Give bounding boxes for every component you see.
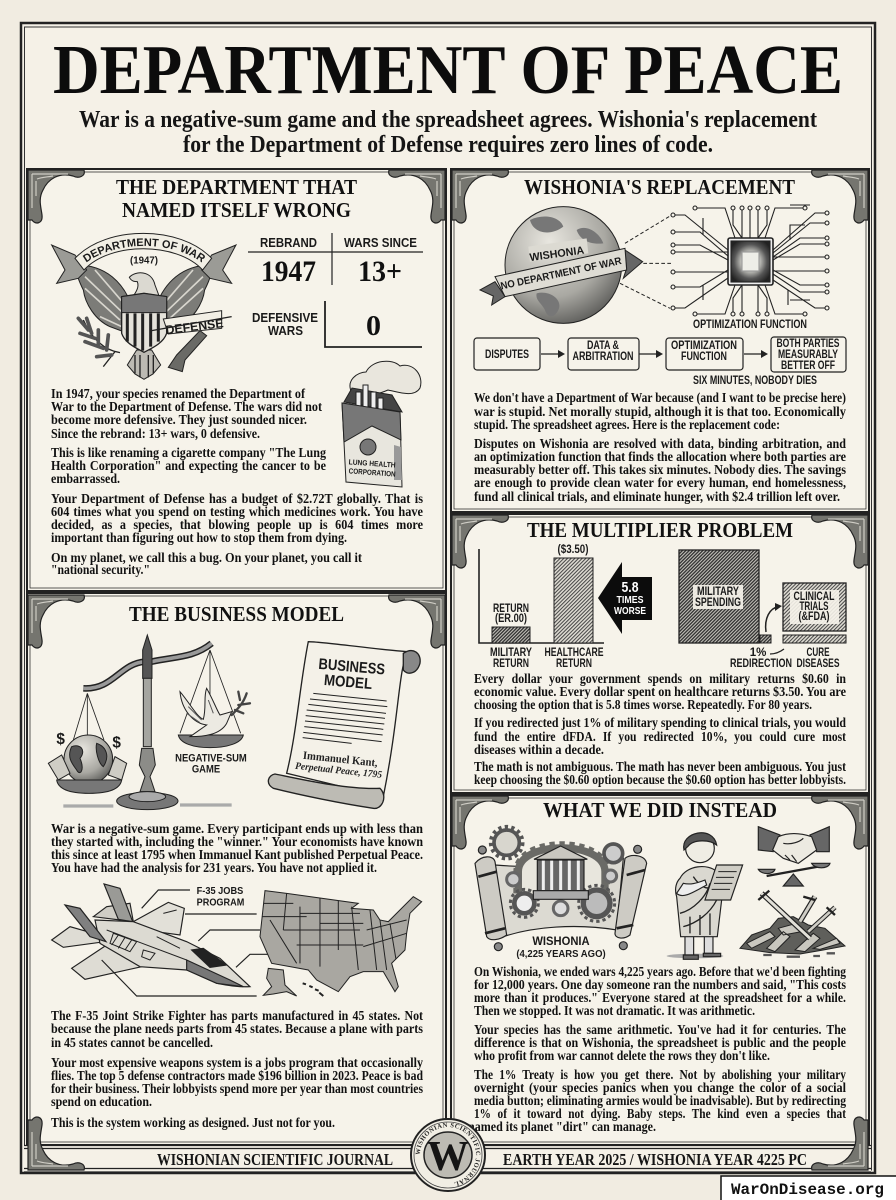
text block: multiplier: choosing the option that is 5.8 times worse. Repeatedly. For 80 years. — [474, 697, 812, 712]
text block: F-35: in 45 states cannot be cancelled. — [51, 1035, 213, 1050]
text block: intro: Health Corporation" and expecting the cancer to be — [51, 458, 326, 473]
footer text left: WISHONIAN SCIENTIFIC JOURNAL — [157, 1150, 393, 1169]
icon: cigarette pack — [342, 361, 421, 487]
chart: military vs clinical trials — [679, 550, 846, 670]
text block: negative-sum: War is a negative-sum game. Every participant ends up with less than — [51, 821, 423, 836]
stats table: WARS — [268, 323, 303, 338]
text block: instead — [468, 964, 846, 1134]
text block: replacement: stupid. The spreadsheet agrees. Here is the replacement code: — [474, 417, 780, 432]
badge: WarOnDisease.org — [721, 1176, 896, 1200]
text block: intro: War to the Department of Defense. The wars did not — [51, 399, 322, 414]
flow diagram: BOTH PARTIES — [776, 338, 840, 350]
text block: instead: for 12,000 years. One day someone ran the numbers and said, "This costs — [474, 977, 846, 992]
icon: globe with ribbon: NO DEPARTMENT OF WAR — [500, 256, 623, 292]
footer band — [24, 1117, 871, 1172]
text block: multiplier: If you redirected just 1% of military spending to clinical trials, you would — [474, 715, 846, 730]
flow diagram: BETTER OFF — [781, 360, 835, 372]
bar chart: returns — [479, 544, 604, 670]
arrow: 5.8 times worse: TIMES — [616, 594, 644, 606]
stats table — [248, 233, 423, 347]
flow diagram — [474, 337, 846, 387]
stats table: REBRAND — [260, 235, 317, 250]
text block: instead: who profit from war cannot delete the rows they don't like. — [474, 1048, 770, 1063]
panel: the department that named itself wrong — [26, 168, 447, 592]
icon: balance scale: GAME — [192, 764, 220, 776]
text block: instead: difference is that on Wishonia, the spreadsheet is public and the people — [474, 1035, 846, 1050]
icon: F-35 jet — [52, 884, 293, 996]
panel: wishonia's replacement — [451, 169, 869, 512]
text block: F-35: spend on education. — [51, 1094, 152, 1109]
text block: negative-sum: they started with, including the "winner." Your economists have known — [51, 834, 423, 849]
icon: business model scroll: Perpetual Peace, 1795 — [295, 761, 383, 781]
title: DEPARTMENT OF PEACE — [53, 32, 843, 109]
icon: scroll with temple and gears: (4,225 YEARS AGO) — [516, 949, 606, 960]
text block: replacement: fund all clinical trials, and eliminate hunger, with $2.4 trillion left over. — [474, 489, 840, 504]
stats table: WARS SINCE — [344, 235, 417, 250]
icon: globe with ribbon — [480, 207, 672, 323]
text block: replacement — [474, 390, 846, 504]
bar chart: returns: MILITARY — [490, 647, 532, 659]
icon: handshake and balance — [758, 827, 830, 886]
header — [53, 32, 843, 158]
chart: military vs clinical trials: MILITARY — [697, 586, 739, 598]
text block: F-35: because the plane needs parts from 45 states. Because a plane with parts — [51, 1021, 423, 1036]
bar chart: returns: ($3.50) — [558, 544, 589, 556]
icon: eagle seal: (1947) — [130, 255, 158, 266]
arrow: 5.8 times worse: 5.8 — [622, 579, 638, 596]
icon: optimization chip: OPTIMIZATION FUNCTION — [693, 319, 807, 331]
text block: intro: 604 times what you spend on testing which medicines work. You have — [51, 504, 423, 519]
text block: replacement: war is stupid. Net morally stupid, although it is that too. Economically — [474, 404, 846, 419]
stats table: 1947 — [261, 255, 316, 288]
text block: intro: On my planet, we call this a bug. On your planet, you call it — [51, 550, 362, 565]
heading — [116, 175, 358, 222]
icon: business model scroll: BUSINESS — [318, 656, 386, 679]
text block: intro: Since the rebrand: 13+ wars, 0 defensive. — [51, 426, 260, 441]
text block: intro: embarrassed. — [51, 471, 120, 486]
bar chart: returns: HEALTHCARE — [544, 647, 604, 659]
bar chart: returns: (ER.00) — [495, 613, 527, 625]
text block: intro: important than figuring out how to stop them from dying. — [51, 530, 347, 545]
text block: intro: decided, as a species, that blowing people up is 604 times more — [51, 517, 423, 532]
stats table: 13+ — [358, 255, 402, 288]
flow diagram: DATA & — [587, 340, 619, 352]
arrow: 5.8 times worse: WORSE — [614, 605, 646, 617]
icon: cigarette pack: LUNG HEALTH — [348, 457, 396, 470]
heading: NAMED ITSELF WRONG — [122, 198, 351, 222]
icon: F-35 jet: F-35 JOBS — [197, 886, 244, 897]
icon: scroll with temple and gears — [475, 827, 647, 960]
flow diagram: SIX MINUTES, NOBODY DIES — [693, 375, 817, 387]
icon: balance scale — [48, 635, 250, 810]
text block: intro: This is like renaming a cigarette company "The Lung — [51, 445, 326, 460]
icon: scroll with temple and gears: WISHONIA — [532, 935, 590, 948]
subtitle: for the Department of Defense requires zero lines of code. — [183, 131, 713, 158]
text block: F-35: Your most expensive weapons system is a jobs program that occasionally — [51, 1055, 423, 1070]
text block: negative-sum: this since at least 1795 when Immanuel Kant published Perpetual Peace. — [51, 847, 423, 862]
arrow: 5.8 times worse — [598, 562, 652, 634]
icon: broken swords — [740, 891, 845, 957]
text block: instead: Your species has the same arithmetic. You've had it for centuries. The — [474, 1022, 846, 1037]
icon: eagle seal: DEFENSE — [165, 316, 224, 337]
text block: negative-sum — [51, 821, 423, 875]
icon: balance scale: NEGATIVE-SUM — [175, 753, 247, 765]
heading: THE DEPARTMENT THAT — [116, 175, 358, 199]
chart: military vs clinical trials: DISEASES — [796, 658, 840, 670]
text block: instead: named its planet "dirt" can manage. — [468, 1119, 656, 1134]
stats table: DEFENSIVE — [252, 310, 318, 325]
footer text right: EARTH YEAR 2025 / WISHONIA YEAR 4225 PC — [503, 1150, 807, 1169]
chart: military vs clinical trials: 1% — [750, 647, 766, 659]
icon: eagle seal — [50, 232, 237, 380]
chart: military vs clinical trials: (&FDA) — [798, 611, 830, 623]
text block: negative-sum: You have had the analysis for 231 years. You have not applied it. — [51, 860, 377, 875]
text block: instead: overnight (your species panics when you change the color of a social — [474, 1080, 846, 1096]
flow diagram: ARBITRATION — [572, 351, 634, 363]
bar chart: returns: RETURN — [493, 603, 529, 615]
chart: military vs clinical trials: CLINICAL — [794, 591, 834, 603]
text block: replacement: are enough to provide clean water for every human, end homelessness, — [474, 475, 846, 490]
chart: military vs clinical trials: TRIALS — [800, 601, 829, 613]
icon: F-35 jet: PROGRAM — [197, 898, 244, 909]
text block: intro: In 1947, your species renamed the Department of — [51, 386, 305, 401]
text block: instead: Then we stopped. It was not dramatic. It was arithmetic. — [474, 1003, 755, 1018]
text block: replacement: measurably better off. This takes six minutes. Nobody dies. The savings — [474, 462, 846, 477]
subtitle: War is a negative-sum game and the spreadsheet agrees. Wishonia's replacement — [79, 106, 818, 133]
heading: THE BUSINESS MODEL — [129, 602, 344, 626]
text block: multiplier: The math is not ambiguous. The math has never been ambiguous. You just — [474, 759, 846, 774]
text block: intro — [51, 386, 423, 577]
icon: US map — [260, 891, 422, 996]
chart: military vs clinical trials: CURE — [806, 647, 830, 659]
icon: balance scale: $ — [56, 731, 65, 748]
icon: business model scroll: MODEL — [323, 672, 373, 693]
text block: multiplier: economic value. Every dollar spent on healthcare returns $3.50. You are — [474, 684, 846, 699]
panel: the multiplier problem — [451, 514, 869, 793]
icon: business model scroll: Immanuel Kant, — [302, 750, 378, 770]
badge: WarOnDisease.org: WarOnDisease.org — [731, 1181, 884, 1199]
flow diagram: OPTIMIZATION — [671, 340, 737, 352]
text block: replacement: an optimization function that finds the allocation where both parties are — [474, 449, 846, 464]
text block: F-35: for their business. Their lobbyists spend more per year than most countries — [51, 1081, 423, 1096]
chart: military vs clinical trials: REDIRECTION — [730, 658, 792, 670]
bar chart: returns: RETURN — [556, 658, 592, 670]
heading: THE MULTIPLIER PROBLEM — [527, 518, 793, 542]
text block: intro: "national security." — [51, 562, 150, 577]
icon: balance scale: $ — [112, 734, 121, 751]
subtitle — [79, 106, 818, 158]
text block: multiplier: Every dollar your government spends on military returns $0.60 in — [474, 671, 846, 686]
text block: F-35: The F-35 Joint Strike Fighter has parts manufactured in 45 states. Not — [51, 1008, 423, 1023]
text block: F-35 — [51, 1008, 423, 1130]
flow diagram: FUNCTION — [681, 351, 727, 363]
bar chart: returns: RETURN — [493, 658, 529, 670]
text block: F-35: This is the system working as designed. Just not for you. — [51, 1115, 335, 1130]
panel: what we did instead — [451, 795, 869, 1145]
flow diagram: DISPUTES — [485, 349, 529, 361]
flow diagram: MEASURABLY — [778, 349, 838, 361]
text block: instead: more than it produces." Everyone stared at the spreadsheet for a while. — [474, 990, 846, 1005]
chart: military vs clinical trials: SPENDING — [695, 597, 741, 609]
icon: globe with ribbon: WISHONIA — [529, 245, 585, 264]
icon: cigarette pack: CORPORATION — [348, 466, 396, 479]
text block: replacement: Disputes on Wishonia are resolved with data, binding arbitration, and — [474, 436, 846, 451]
heading: WHAT WE DID INSTEAD — [543, 798, 777, 822]
panel: the business model — [27, 593, 446, 1145]
icon: optimization chip — [671, 205, 829, 331]
text block: multiplier — [474, 671, 846, 787]
text block: intro: Your Department of Defense has a budget of $2.72T globally. That is — [51, 491, 423, 506]
seal: WISHONIAN SCIENTIFIC JOURNAL — [416, 1122, 480, 1186]
text block: intro: become more defensive. They just sounded nicer. — [51, 412, 307, 427]
icon: business model scroll — [268, 642, 420, 808]
icon: eagle seal: DEPARTMENT OF WAR — [82, 238, 205, 262]
seal: W — [427, 1134, 469, 1180]
heading: WISHONIA'S REPLACEMENT — [524, 175, 796, 199]
icon: person with tablet — [667, 833, 743, 959]
stats table: 0 — [366, 310, 381, 342]
text block: F-35: flies. The top 5 defense contractors made $196 billion in 2023. Peace is bad — [51, 1068, 423, 1083]
text block: multiplier: diseases within a decade. — [474, 742, 604, 757]
